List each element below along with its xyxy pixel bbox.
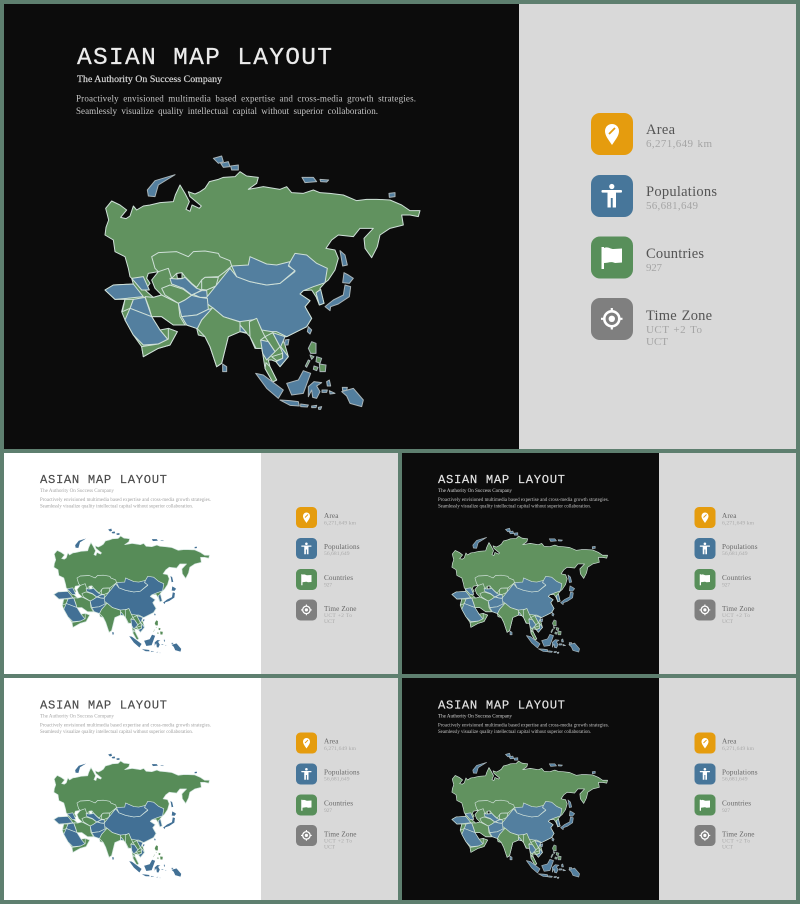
subtitle: The Authority On Success Company [438,714,512,720]
stat: countries: 927 [324,808,332,814]
stat: time zone: Time Zone [324,830,356,838]
title: ASIAN MAP LAYOUT [40,698,167,712]
stat: time zone: UCT +2 To [722,613,750,619]
stat: countries: Countries [722,574,751,582]
stat: countries [694,569,751,590]
description text: Seamlessly visualize quality intellectual capital without superior collaboration. [76,106,378,116]
title: ASIAN MAP LAYOUT [438,473,565,487]
stat: time zone [694,825,754,850]
stat: populations: 56,681,649 [722,551,748,557]
stat: populations: Populations [722,543,758,551]
description text [438,724,609,735]
stat: time zone: Time Zone [646,308,712,324]
stat: countries [296,569,353,590]
stat: time zone: UCT [646,336,668,348]
stat: countries: 927 [722,808,730,814]
stat: area: 6,271,649 km [324,520,357,526]
stat: area [694,507,755,528]
stat: time zone: Time Zone [722,605,754,613]
stat: populations: 56,681,649 [324,551,350,557]
stat: area: 6,271,649 km [646,138,712,150]
stat: populations: Populations [324,543,360,551]
stat: countries: 927 [722,582,730,588]
panel: dark slide bottom [402,678,796,900]
panel: main dark slide [4,4,796,449]
stat: time zone: UCT +2 To [646,324,702,336]
description text [40,498,211,510]
stat: populations: 56,681,649 [646,200,698,212]
description text: Seamlessly visualize quality intellectual capital without superior collaboration. [438,504,591,510]
stat: area: Area [324,512,339,520]
description text: Proactively envisioned multimedia based expertise and cross-media growth strategies. [438,724,609,728]
stat: time zone: UCT +2 To [722,838,750,844]
stat: time zone: UCT +2 To [324,613,352,619]
stat: populations [296,538,360,559]
stat: area [591,113,712,155]
subtitle: The Authority On Success Company [40,488,114,494]
map of Asia [452,528,608,653]
title: ASIAN MAP LAYOUT [438,698,565,712]
stat: countries: 927 [324,582,332,588]
description text: Proactively envisioned multimedia based expertise and cross-media growth strategies. [40,724,211,728]
map of Asia [105,156,420,409]
stat: time zone [296,825,356,850]
panel: dark slide top [402,453,796,674]
subtitle: The Authority On Success Company [438,488,512,494]
stat: time zone: Time Zone [722,830,754,838]
stat: area: Area [324,738,339,746]
description text [40,724,211,735]
stat: populations: Populations [722,768,758,776]
stat: time zone [591,298,712,348]
stat: time zone: UCT [324,844,336,850]
stat: time zone: UCT [722,619,734,625]
stat: populations: 56,681,649 [324,776,350,782]
description text: Seamlessly visualize quality intellectual capital without superior collaboration. [40,730,193,735]
stat: countries: 927 [646,262,662,274]
stat: time zone [296,600,356,625]
description text: Seamlessly visualize quality intellectual capital without superior collaboration. [438,730,591,735]
stat: area [296,732,357,754]
stat: time zone: UCT [722,844,734,850]
stat: area: 6,271,649 km [722,520,755,526]
stat: time zone: UCT [324,619,336,625]
subtitle: The Authority On Success Company [40,714,114,720]
stat: countries: Countries [324,800,353,808]
map of Asia [54,528,210,653]
stat: countries [694,794,751,816]
description text [76,94,416,116]
stat: countries [296,794,353,816]
stat: populations [296,764,360,784]
stat: countries: Countries [722,800,751,808]
stat: countries: Countries [646,246,704,262]
stat: time zone [694,600,754,625]
stat: area: 6,271,649 km [722,746,755,752]
panel: white slide bottom [4,678,398,900]
description text: Proactively envisioned multimedia based expertise and cross-media growth strategies. [438,498,609,503]
description text: Seamlessly visualize quality intellectual capital without superior collaboration. [40,504,193,510]
map of Asia [452,753,608,878]
description text: Proactively envisioned multimedia based expertise and cross-media growth strategies. [40,498,211,503]
stat: populations [694,764,758,784]
panel: white slide top [4,453,398,674]
stat: area: Area [646,122,676,138]
stat: populations [694,538,758,559]
title: ASIAN MAP LAYOUT [77,45,332,72]
stat: area: Area [722,738,737,746]
stat: area [296,507,357,528]
stat: area: Area [722,512,737,520]
map of Asia [54,753,210,878]
stat: countries: Countries [324,574,353,582]
stat: populations: Populations [324,768,360,776]
description text: Proactively envisioned multimedia based expertise and cross-media growth strategies. [76,94,416,104]
subtitle: The Authority On Success Company [77,74,222,85]
stat: time zone: UCT +2 To [324,838,352,844]
title: ASIAN MAP LAYOUT [40,473,167,487]
stat: area: 6,271,649 km [324,746,357,752]
stat: populations: 56,681,649 [722,776,748,782]
stat: populations [591,175,717,217]
description text [438,498,609,510]
stat: time zone: Time Zone [324,605,356,613]
stat: populations: Populations [646,184,717,200]
stat: countries [591,236,704,278]
stat: area [694,732,755,754]
